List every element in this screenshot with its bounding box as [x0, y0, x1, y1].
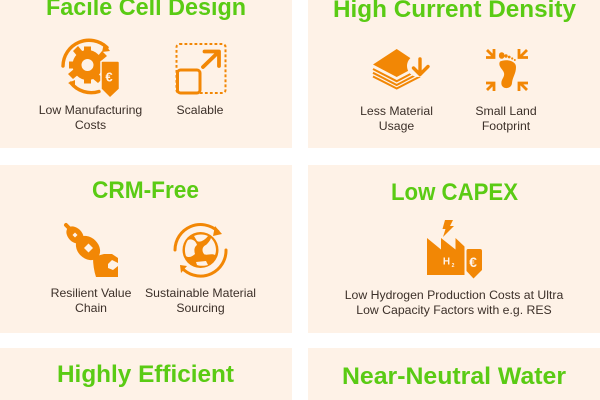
panel: highly efficient: [0, 348, 292, 400]
label: resilient value chain: Resilient Value: [51, 286, 132, 300]
heading: highly efficient: Highly Efficient: [57, 361, 234, 388]
icon: factory with euro tag: H: [443, 256, 450, 268]
icon: gear with euro tag: €: [105, 70, 113, 84]
label: low manufacturing costs: Costs: [75, 118, 106, 132]
heading: low capex: Low CAPEX: [391, 179, 518, 206]
icon: material layers with down arrow: [373, 49, 429, 88]
label: small land footprint: [475, 104, 537, 133]
panel: crm-free: [0, 165, 292, 333]
label: low hydrogen production costs: Low Capacity Factors with e.g. RES: [356, 303, 552, 317]
label: low hydrogen production costs: [345, 288, 563, 317]
label: resilient value chain: [51, 286, 132, 315]
heading: near-neutral water: Near-Neutral Water: [342, 363, 566, 390]
icon: globe with recycling arrows: [175, 225, 226, 276]
panel: low capex: [308, 165, 600, 333]
icon: gear with euro tag: [63, 40, 120, 98]
icon: scalable: [176, 44, 226, 93]
heading: crm-free: CRM-Free: [92, 177, 199, 204]
label: low hydrogen production costs: Low Hydrogen Production Costs at Ultra: [345, 288, 563, 302]
label: small land footprint: Footprint: [482, 119, 531, 133]
label: sustainable material sourcing: [145, 286, 256, 315]
panel: facile cell design: [0, 0, 292, 148]
icon: factory with euro tag: [427, 220, 482, 278]
label: low manufacturing costs: Low Manufacturing: [39, 103, 142, 117]
icon: footprint with inward arrows: [486, 49, 528, 91]
label: low manufacturing costs: [39, 103, 142, 132]
panel: near-neutral water: [308, 348, 600, 400]
label: sustainable material sourcing: Sourcing: [176, 301, 225, 315]
label: less material usage: Usage: [379, 119, 414, 133]
icon: factory with euro tag: €: [469, 254, 477, 270]
label: sustainable material sourcing: Sustainable Material: [145, 286, 256, 300]
label: small land footprint: Small Land: [475, 104, 537, 118]
label: resilient value chain: Chain: [75, 301, 107, 315]
panel: high current density: [308, 0, 600, 148]
icon: chain with wrench: [63, 223, 118, 277]
label: scalable: Scalable: [176, 103, 224, 117]
label: less material usage: [360, 104, 433, 133]
icon: factory with euro tag: 2: [452, 263, 455, 269]
label: less material usage: Less Material: [360, 104, 433, 118]
